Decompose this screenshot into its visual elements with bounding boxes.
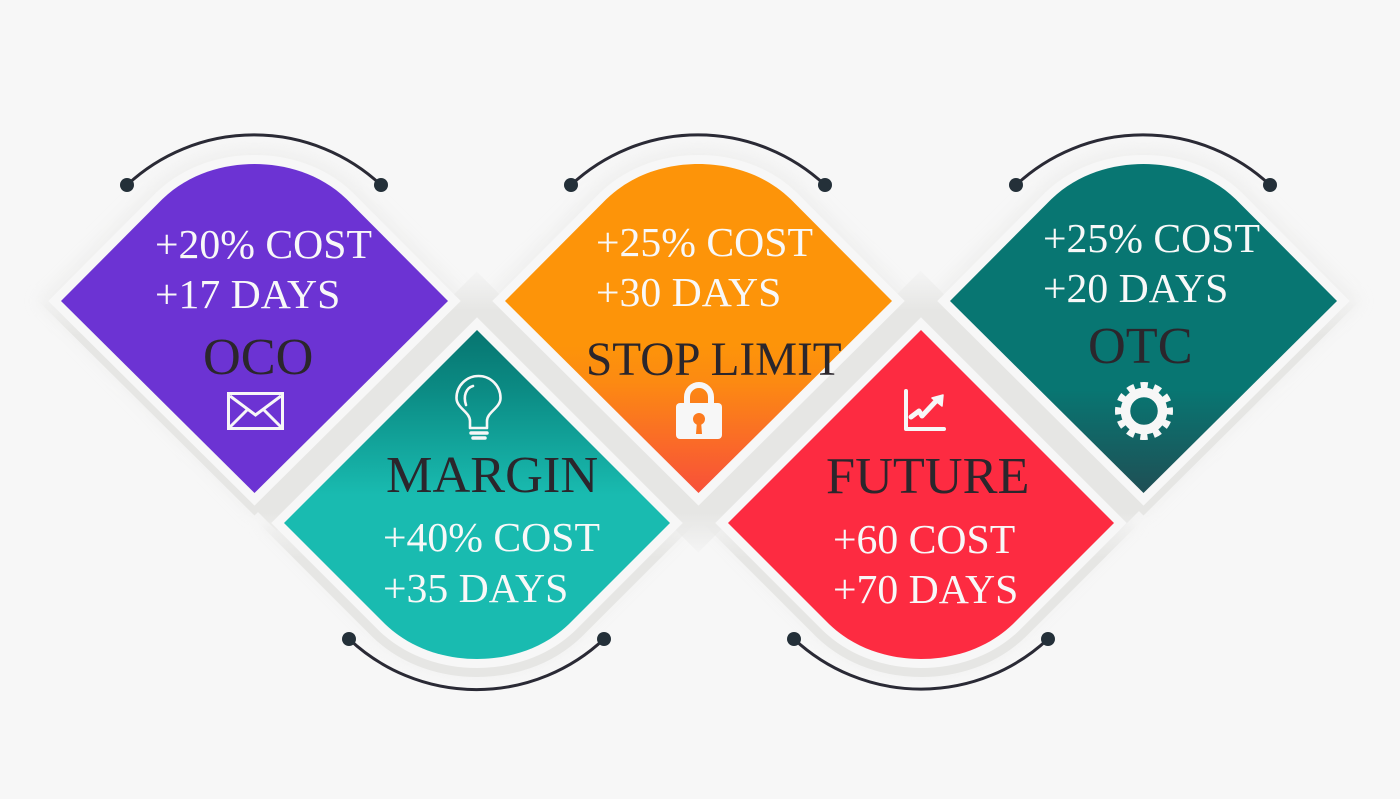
text: OCO days: +17 DAYS <box>155 272 340 318</box>
arc: FUTURE <box>787 632 1055 689</box>
icon: line chart <box>906 391 944 429</box>
text: STOP LIMIT days: +30 DAYS <box>596 270 781 316</box>
panel: FUTURE <box>728 330 1114 689</box>
text: OCO cost: +20% COST <box>155 222 372 268</box>
icon: light bulb <box>456 376 500 438</box>
heading: STOP LIMIT: STOP LIMIT <box>586 334 842 386</box>
text: FUTURE cost: +60 COST <box>833 517 1015 563</box>
panel: STOP LIMIT <box>505 135 892 493</box>
panel: MARGIN <box>284 330 670 690</box>
heading: OTC: OTC <box>1088 317 1193 375</box>
text: MARGIN days: +35 DAYS <box>383 566 568 612</box>
soft halos <box>61 164 1337 659</box>
text: FUTURE days: +70 DAYS <box>833 567 1018 613</box>
arc: STOP LIMIT <box>564 135 832 192</box>
icon: envelope <box>228 394 282 428</box>
arc: OTC <box>1009 135 1277 192</box>
icon: padlock <box>676 385 722 439</box>
text: MARGIN cost: +40% COST <box>383 515 600 561</box>
heading: OCO: OCO <box>203 328 313 386</box>
icon: gear <box>1119 386 1169 436</box>
text: STOP LIMIT cost: +25% COST <box>596 220 813 266</box>
heading: FUTURE: FUTURE <box>826 447 1029 505</box>
arc: OCO <box>120 135 388 192</box>
text: OTC days: +20 DAYS <box>1043 266 1228 312</box>
text: OTC cost: +25% COST <box>1043 216 1260 262</box>
panel: OCO <box>61 135 448 493</box>
arc: MARGIN <box>342 632 611 690</box>
heading: MARGIN: MARGIN <box>386 446 598 504</box>
grey zigzag band between panels <box>262 300 1135 523</box>
panel: OTC <box>950 135 1337 493</box>
grey outer edges <box>61 164 1337 659</box>
